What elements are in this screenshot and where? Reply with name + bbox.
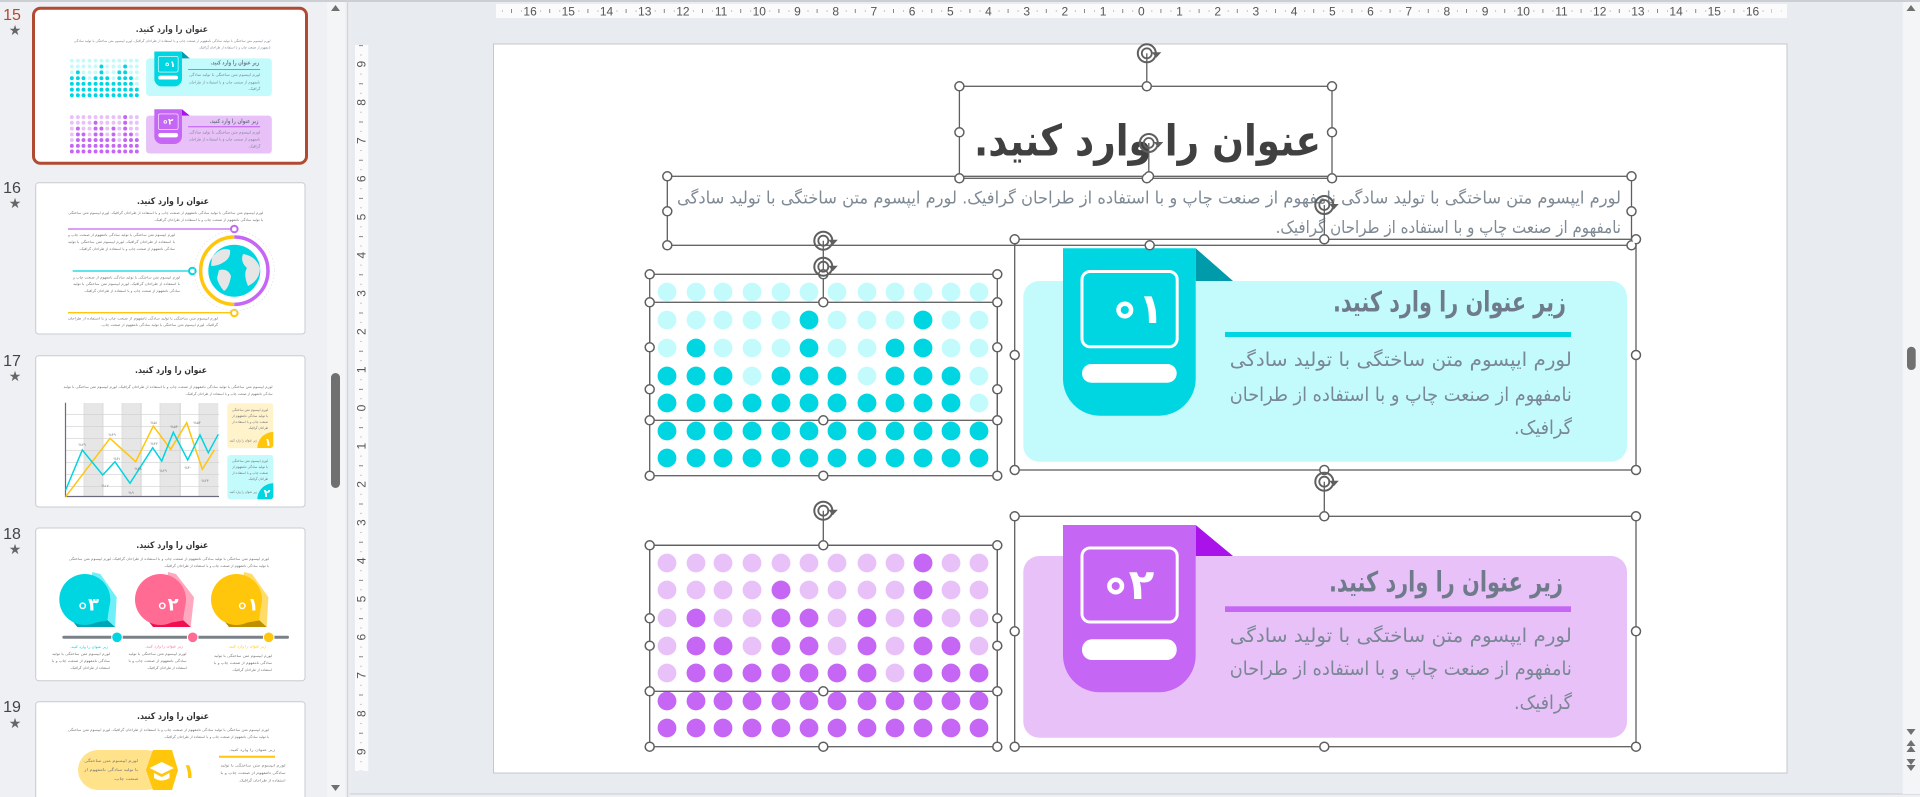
horizontal ruler: 7: [871, 4, 878, 18]
thumbnail 18 timeline slide: زیر عنوان را وارد کنید.: [145, 644, 183, 648]
thumbnail 17 line chart slide: %۲۹: [78, 443, 86, 447]
heading 02: زیر عنوان را وارد کنید.: [1329, 566, 1563, 598]
intro text: نامفهوم از صنعت چاپ و با استفاده از طراحان گرافیک.: [1276, 217, 1621, 238]
thumbnail 17 line chart slide: ۱: [265, 436, 271, 449]
thumbnail 15 selected frame: [34, 8, 306, 163]
thumbnail 17 line chart slide: %۵۳: [170, 425, 178, 429]
thumbnail 17 line chart slide: لورم ایپسوم متن ساختگی: [232, 407, 268, 413]
intro text: لورم ایپسوم متن ساختگی با تولید سادگی نامفهوم از صنعت چاپ و با استفاده از طراحان گرافیک. لورم ایپسوم متن ساختگی با تولید سادگی: [677, 188, 1621, 208]
body text 01: نامفهوم از صنعت چاپ و با استفاده از طراحان: [1230, 384, 1572, 406]
vertical ruler: 1: [354, 366, 368, 373]
thumbnail 17 line chart slide: زیر عنوان را وارد کنید.: [229, 438, 257, 442]
ribbon fold: [1196, 248, 1233, 281]
thumbnail 17 line chart slide: طراحان گرافیک.: [248, 476, 268, 481]
thumbnail 17 line chart slide: صنعت چاپ و با استفاده از: [231, 471, 268, 475]
thumbnail 17 line chart slide: %۹: [128, 491, 134, 495]
thumbnail number 15: 15: [3, 7, 21, 24]
vertical ruler: 6: [354, 634, 368, 641]
horizontal ruler: [496, 4, 1787, 18]
thumbnail 18 timeline slide: استفاده از طراحان گرافیک.: [147, 665, 187, 670]
vertical ruler: 0: [354, 404, 368, 411]
vertical ruler: 3: [354, 290, 368, 297]
vertical ruler: [354, 45, 368, 771]
thumbnail 17 line chart slide: زیر عنوان را وارد کنید.: [229, 490, 257, 494]
selection handles: [650, 86, 1636, 747]
thumbnail 17 line chart slide: صنعت چاپ و با استفاده از: [231, 420, 268, 424]
thumbnail 16 globe slide: سادگی نامفهوم از صنعت چاپ و با استفاده از طراحان گرافیک.: [84, 288, 180, 294]
horizontal ruler: 9: [794, 4, 801, 18]
thumbnail 19 pill slide: صنعت چاپ.: [114, 776, 139, 781]
horizontal ruler: 2: [1062, 4, 1069, 18]
thumbnail 16 globe slide: با استفاده از طراحان گرافیک. لورم ایپسوم متن ساختگی با تولید: [73, 281, 180, 287]
thumbnail 17 line chart slide: طراحان گرافیک.: [248, 425, 268, 430]
thumbnail 17 line chart slide: ۲: [264, 487, 271, 500]
panel: card 01: [1023, 248, 1627, 462]
thumbnail 16 globe slide: لورم ایپسوم متن ساختگی با تولید سادگی نامفهوم از صنعت چاپ و با استفاده از طراحان: [68, 315, 218, 321]
horizontal ruler: 10: [1517, 4, 1530, 18]
number 01: ۰۱: [1112, 284, 1164, 333]
intro text: [677, 188, 1621, 238]
vertical ruler: 3: [354, 519, 368, 526]
horizontal ruler: 1: [1176, 4, 1183, 18]
thumbnail 17 line chart slide: %۲۸: [134, 467, 142, 471]
body text 02: [1230, 624, 1573, 714]
thumbnail 19 pill slide: سادگی نامفهوم از صنعت چاپ و با: [220, 770, 286, 776]
thumbnail 18 timeline slide: لورم ایپسوم متن ساختگی با تولید: [128, 651, 186, 657]
body text 02: گرافیک.: [1514, 691, 1573, 714]
thumbnail 18 timeline slide: زیر عنوان را وارد کنید.: [228, 644, 266, 648]
vertical ruler: 2: [354, 481, 368, 488]
horizontal ruler: 4: [985, 4, 992, 18]
horizontal ruler: 14: [1669, 4, 1683, 18]
thumbnail 19 pill slide: با تولید سادگی نامفهوم از صنعت چاپ و با استفاده از طراحان گرافیک.: [164, 734, 269, 740]
thumbnail 18 timeline slide: استفاده از طراحان گرافیک.: [70, 665, 110, 670]
thumbnail 19 pill slide: عنوان را وارد کنید.: [137, 712, 209, 722]
body text 01: [1230, 348, 1573, 439]
vertical ruler: 8: [354, 710, 368, 717]
body text 01: گرافیک.: [1514, 416, 1573, 439]
thumbnail 19 pill slide: لورم ایپسوم متن ساختگی: [84, 758, 138, 763]
panel: card 02: [1023, 525, 1627, 738]
thumbnail 18 timeline slide: عنوان را وارد کنید.: [136, 541, 208, 551]
thumbnail 17 line chart slide: با تولید سادگی نامفهوم از: [231, 464, 268, 470]
thumbnail 17 line chart slide: لورم ایپسوم متن ساختگی با تولید سادگی نامفهوم از صنعت چاپ و با استفاده از طراحان گرافیک. لورم ایپسوم متن ساختگی با تولید: [64, 384, 272, 390]
heading rule: [1225, 606, 1571, 612]
thumbnail 19 pill slide: با تولید سادگی نامفهوم از: [83, 767, 138, 772]
horizontal ruler: 2: [1214, 4, 1221, 18]
top border line: [0, 0, 1920, 2]
horizontal ruler: 0: [1138, 4, 1145, 18]
thumbnail 16 globe slide: لورم ایپسوم متن ساختگی با تولید سادگی نامفهوم از صنعت چاپ و: [67, 232, 175, 238]
thumbnail 17 line chart slide: %۵۳: [193, 421, 201, 425]
thumbnail 17 line chart slide: %۲۳: [201, 479, 209, 483]
thumbnail pane scrollbar: [327, 2, 345, 797]
thumbnail number 16: 16: [3, 180, 21, 197]
thumbnail 18 timeline slide: ۰۱: [237, 594, 259, 616]
thumbnail number 18: 18: [3, 526, 21, 543]
title: عنوان را وارد کنید.: [974, 116, 1321, 166]
thumbnail 17 line chart slide: %۱۷: [101, 484, 109, 488]
white pill: [1082, 639, 1177, 660]
star 19: ★: [9, 716, 21, 732]
horizontal ruler: 12: [676, 4, 690, 18]
thumbnail 16 globe slide: [36, 183, 305, 334]
star 18: ★: [9, 542, 21, 558]
thumbnail 16 globe slide: با تولید سادگی نامفهوم از صنعت چاپ و با استفاده از طراحان گرافیک.: [154, 217, 263, 223]
white pill: [1082, 364, 1177, 383]
horizontal ruler: 7: [1405, 4, 1412, 18]
horizontal ruler: 16: [1746, 4, 1759, 18]
thumbnail 17 line chart slide: [36, 356, 305, 507]
star 16: ★: [9, 196, 21, 212]
horizontal ruler: 15: [562, 4, 575, 18]
star 15: ★: [9, 23, 21, 39]
thumbnail 18 timeline slide: لورم ایپسوم متن ساختگی با تولید: [214, 653, 272, 659]
thumbnail 16 globe slide: گرافیک. لورم ایپسوم متن ساختگی با تولید سادگی نامفهوم از صنعت چاپ.: [101, 322, 218, 328]
slide content: [667, 116, 1627, 738]
thumbnail 19 pill slide: لورم ایپسوم متن ساختگی با تولید: [220, 762, 286, 768]
horizontal ruler: 5: [947, 4, 954, 18]
thumbnail 18 timeline slide: با تولید سادگی نامفهوم از صنعت چاپ و با استفاده از طراحان گرافیک.: [164, 563, 269, 569]
vertical ruler: 6: [354, 175, 368, 182]
thumbnail 17 line chart slide: %۳۹: [108, 433, 116, 437]
horizontal ruler: 11: [1555, 4, 1568, 18]
number 02: ۰۲: [1103, 560, 1155, 609]
thumbnail 19 pill slide: ۱: [183, 759, 195, 783]
vertical ruler: 9: [354, 61, 368, 68]
horizontal ruler: 6: [1367, 4, 1374, 18]
thumbnail 19 pill slide: زیر عنوان را وارد کنید.: [229, 748, 275, 752]
vertical ruler: 8: [354, 99, 368, 106]
thumbnail 18 timeline slide: ۰۳: [77, 594, 99, 616]
selection frames: [650, 53, 1636, 747]
thumbnail 18 timeline slide: استفاده از طراحان گرافیک.: [232, 667, 272, 672]
body text 01: لورم ایپسوم متن ساختگی با تولید سادگی: [1230, 348, 1572, 371]
body text 02: لورم ایپسوم متن ساختگی با تولید سادگی: [1230, 624, 1572, 647]
horizontal ruler: 6: [909, 4, 916, 18]
ribbon fold: [1196, 525, 1233, 556]
horizontal ruler: 11: [715, 4, 728, 18]
vertical ruler: 4: [354, 252, 368, 259]
horizontal ruler: 1: [1100, 4, 1107, 18]
thumbnail 17 line chart slide: %۳۰: [184, 466, 192, 470]
vertical ruler: 5: [354, 213, 368, 220]
horizontal ruler: 13: [1631, 4, 1645, 18]
thumbnail 16 globe slide: سادگی نامفهوم از صنعت چاپ و با استفاده از طراحان گرافیک.: [79, 246, 175, 252]
thumbnail 15 miniature of slide: [72, 25, 272, 153]
vertical ruler: 2: [354, 328, 368, 335]
thumbnail number 19: 19: [3, 699, 21, 716]
thumbnail 17 line chart slide: %۵۱: [150, 421, 158, 425]
vertical ruler: 5: [354, 595, 368, 602]
horizontal ruler: 3: [1023, 4, 1030, 18]
thumbnail 16 globe slide: عنوان را وارد کنید.: [137, 197, 209, 207]
dot grid: cyan: [667, 292, 979, 458]
number box 02: [1082, 548, 1177, 622]
dot grid: purple: [667, 563, 979, 728]
horizontal ruler: 13: [638, 4, 652, 18]
star 17: ★: [9, 369, 21, 385]
ribbon: [1063, 248, 1196, 416]
horizontal ruler: 5: [1329, 4, 1336, 18]
horizontal ruler: 3: [1253, 4, 1260, 18]
rotate handles: [814, 44, 1339, 520]
heading 01: زیر عنوان را وارد کنید.: [1333, 286, 1566, 318]
thumbnail 18 timeline slide: سادگی نامفهوم از صنعت چاپ و با: [214, 660, 272, 666]
vertical ruler: 7: [354, 137, 368, 144]
horizontal ruler: 15: [1708, 4, 1721, 18]
thumbnail 16 globe slide: لورم ایپسوم متن ساختگی با تولید سادگی نامفهوم از صنعت چاپ و با استفاده از طراحان گرافیک. لورم ایپسوم متن ساختگی: [68, 210, 263, 216]
thumbnail 19 pill slide: استفاده از طراحان گرافیک.: [238, 778, 286, 782]
vertical ruler: 4: [354, 557, 368, 564]
thumbnail 17 line chart slide: لورم ایپسوم متن ساختگی: [232, 458, 268, 464]
horizontal ruler: 8: [1444, 4, 1451, 18]
bottom status edge: [350, 794, 1920, 797]
right scrollbar: [1903, 2, 1920, 794]
horizontal ruler: 10: [753, 4, 766, 18]
thumbnail number 17: 17: [3, 353, 21, 370]
thumbnail 18 timeline slide: [36, 528, 305, 681]
horizontal ruler: 4: [1291, 4, 1298, 18]
thumbnail 18 timeline slide: سادگی نامفهوم از صنعت چاپ و با: [128, 658, 186, 664]
horizontal ruler: 12: [1593, 4, 1607, 18]
horizontal ruler: 8: [832, 4, 839, 18]
thumbnail 18 timeline slide: سادگی نامفهوم از صنعت چاپ و با: [52, 658, 110, 664]
thumbnail 17 line chart slide: %۳۱: [113, 457, 121, 461]
thumbnail 18 timeline slide: زیر عنوان را وارد کنید.: [70, 645, 108, 649]
slide page: [494, 44, 1787, 773]
thumbnail 17 line chart slide: %۲۹: [159, 469, 167, 473]
thumbnail 18 timeline slide: ۰۲: [157, 594, 179, 616]
number box 01: [1082, 272, 1177, 347]
thumbnail 19 pill slide: [36, 702, 305, 797]
vertical ruler: 9: [354, 748, 368, 755]
thumbnail 16 globe slide: با استفاده از طراحان گرافیک. لورم ایپسوم متن ساختگی با تولید: [68, 239, 175, 245]
thumbnail 18 timeline slide: لورم ایپسوم متن ساختگی با تولید: [52, 651, 110, 657]
thumbnail 17 line chart slide: عنوان را وارد کنید.: [135, 366, 207, 376]
thumbnail 19 pill slide: لورم ایپسوم متن ساختگی با تولید سادگی نامفهوم از صنعت چاپ و با استفاده از طراحان گرافیک. لورم ایپسوم متن ساختگی: [68, 727, 269, 733]
thumbnail 18 timeline slide: لورم ایپسوم متن ساختگی با تولید سادگی نامفهوم از صنعت چاپ و با استفاده از طراحان گرافیک. لورم ایپسوم متن ساختگی: [69, 556, 269, 562]
thumbnail 17 line chart slide: %۳۲: [150, 442, 158, 446]
vertical ruler: 7: [354, 672, 368, 679]
ribbon: [1063, 525, 1196, 692]
heading rule: [1225, 332, 1571, 337]
horizontal ruler: 9: [1482, 4, 1489, 18]
thumbnail 16 globe slide: لورم ایپسوم متن ساختگی با تولید سادگی نامفهوم از صنعت چاپ و: [72, 274, 180, 280]
vertical ruler: 1: [354, 443, 368, 450]
horizontal ruler: 16: [523, 4, 537, 18]
thumbnail 17 line chart slide: با تولید سادگی نامفهوم از: [231, 413, 268, 419]
thumbnail 17 line chart slide: سادگی نامفهوم از صنعت چاپ و با استفاده از طراحان گرافیک.: [186, 391, 272, 397]
body text 02: نامفهوم از صنعت چاپ و با استفاده از طراحان: [1230, 658, 1572, 680]
thumbnail pane background: [0, 0, 347, 797]
horizontal ruler: 14: [600, 4, 613, 18]
